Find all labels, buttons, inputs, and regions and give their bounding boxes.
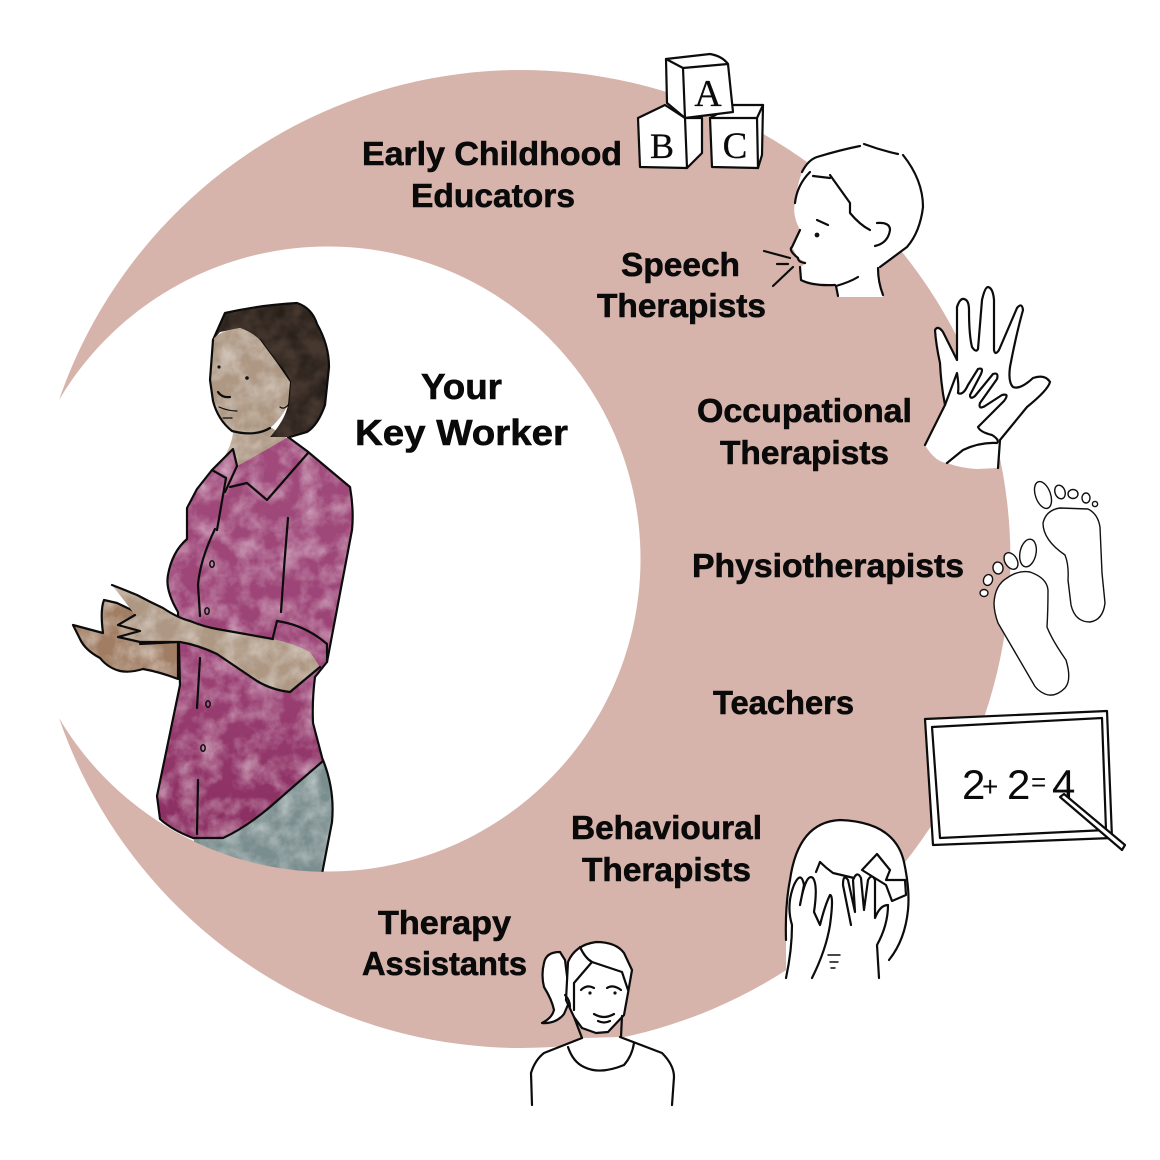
hair bow bbox=[862, 854, 906, 901]
label: Your Key Worker: Your bbox=[421, 366, 502, 407]
child hand bbox=[925, 369, 1007, 463]
sum: + bbox=[982, 771, 998, 802]
block letters: A bbox=[694, 73, 722, 115]
block edges bbox=[666, 59, 763, 168]
trousers outline bbox=[322, 760, 333, 874]
label: Occupational Therapists: Occupational bbox=[697, 392, 912, 429]
label: Behavioural Therapists: Behavioural bbox=[571, 809, 762, 846]
icon: footprints bbox=[980, 479, 1105, 695]
icon: alphabet blocks: C bbox=[723, 126, 747, 167]
body and face lines bbox=[531, 947, 674, 1105]
block A bbox=[666, 54, 733, 118]
label: Early Childhood Educators: Early Childhood bbox=[362, 135, 622, 172]
board frame bbox=[925, 711, 1112, 845]
board inner frame bbox=[932, 718, 1106, 838]
pen bbox=[1060, 794, 1125, 850]
label: Behavioural Therapists bbox=[571, 809, 762, 888]
label: Your Key Worker bbox=[355, 366, 568, 453]
label: Physiotherapists: Physiotherapists bbox=[692, 547, 964, 584]
label: Teachers: Teachers bbox=[713, 684, 854, 721]
label: Your Key Worker: Key Worker bbox=[355, 412, 568, 453]
shirt buttons bbox=[201, 561, 214, 751]
block B bbox=[638, 105, 702, 168]
trousers bbox=[193, 760, 333, 874]
label: Therapy Assistants: Assistants bbox=[362, 945, 527, 982]
illustration: key worker woman bbox=[73, 303, 353, 874]
head bbox=[566, 942, 632, 1033]
hair and head bbox=[786, 820, 908, 978]
sum: 4 bbox=[1052, 761, 1075, 808]
label: Speech Therapists: Speech bbox=[621, 246, 740, 283]
crescent background bbox=[59, 70, 1010, 1048]
icon: chalkboard with sum bbox=[925, 711, 1125, 850]
label: Therapy Assistants: Therapy bbox=[378, 904, 512, 941]
collar and shirt lines bbox=[197, 453, 327, 834]
neck bbox=[225, 428, 287, 466]
label: Occupational Therapists: Therapists bbox=[720, 434, 889, 471]
back hand outline bbox=[73, 600, 178, 679]
adult hand outline bbox=[935, 287, 1050, 468]
label: Occupational Therapists bbox=[697, 392, 912, 471]
sum: 2 bbox=[962, 761, 985, 808]
face bbox=[210, 328, 290, 433]
shirt bbox=[157, 437, 353, 838]
speech breath lines bbox=[764, 251, 793, 286]
block C bbox=[710, 105, 763, 168]
hair outline bbox=[213, 303, 329, 437]
front arm outline bbox=[112, 585, 320, 692]
icon: alphabet blocks bbox=[638, 54, 763, 168]
icon: alphabet blocks: B bbox=[650, 126, 674, 166]
label: Early Childhood Educators bbox=[362, 135, 622, 214]
icon: therapy assistant with ponytail bbox=[531, 942, 674, 1105]
label: Therapy Assistants bbox=[362, 904, 527, 982]
outline bbox=[786, 820, 908, 978]
lower foot bbox=[980, 538, 1069, 695]
sum: = bbox=[1031, 767, 1046, 797]
sum: 2 bbox=[1007, 761, 1030, 808]
label: Early Childhood Educators: Educators bbox=[411, 177, 575, 214]
hair bbox=[213, 303, 329, 437]
adult hand white fill bbox=[925, 287, 1050, 469]
shirt outline bbox=[157, 437, 353, 838]
child head bbox=[792, 146, 923, 297]
icon: adult and child hands bbox=[925, 287, 1050, 469]
body bbox=[531, 1037, 674, 1105]
back forearm and hand bbox=[73, 600, 178, 679]
upper foot bbox=[1031, 479, 1105, 622]
ponytail bbox=[542, 952, 570, 1023]
face outline and features bbox=[210, 340, 288, 433]
child outline bbox=[791, 144, 923, 296]
icon: child speaking bbox=[764, 144, 923, 297]
label: Behavioural Therapists: Therapists bbox=[582, 851, 751, 888]
label: Speech Therapists: Therapists bbox=[597, 287, 766, 324]
icon: girl covering eyes bbox=[786, 820, 908, 978]
front forearm and hand bbox=[112, 585, 320, 692]
label: Speech Therapists bbox=[597, 246, 766, 324]
